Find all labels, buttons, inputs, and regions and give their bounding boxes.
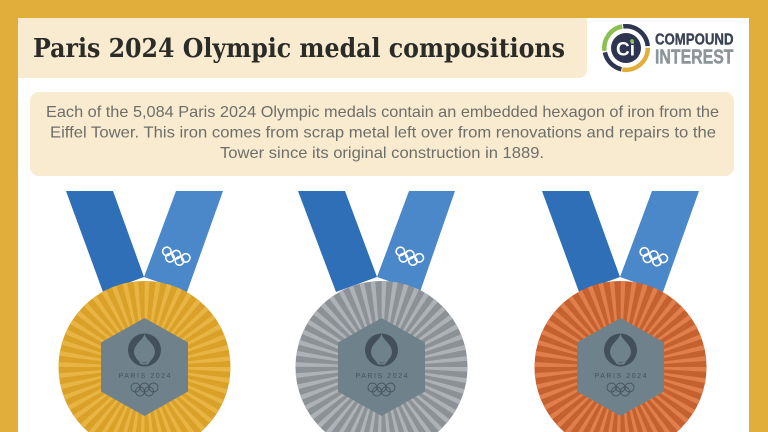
- silver disc: [296, 281, 468, 432]
- bronze disc: [534, 281, 706, 432]
- logo: Compound Interest: [604, 26, 734, 70]
- bronze disc: PARIS 2024: [594, 373, 647, 380]
- gold disc: [58, 281, 230, 432]
- bronze ribbon: [542, 191, 699, 292]
- intro text panel: Eiffel Tower. This iron comes from scrap metal left over from renovations and repairs to the: [50, 124, 716, 142]
- logo: Compound Interest: Ci: [616, 40, 635, 60]
- silver medal: [296, 191, 468, 432]
- title: Paris 2024 Olympic medal compositions: [33, 34, 565, 64]
- silver disc: PARIS 2024: [356, 373, 408, 380]
- logo: Compound Interest: COMPOUND: [655, 31, 734, 48]
- bronze medal: [534, 191, 706, 432]
- silver ribbon: [298, 191, 455, 292]
- intro text panel: Tower since its original construction in 1889.: [220, 145, 544, 162]
- intro text panel: Each of the 5,084 Paris 2024 Olympic medals contain an embedded hexagon of iron from the: [46, 104, 719, 121]
- title banner: [18, 18, 587, 78]
- intro text panel: [30, 92, 734, 176]
- gold medal: [58, 191, 230, 432]
- logo: Compound Interest: INTEREST: [655, 46, 734, 68]
- gold ribbon: [66, 191, 223, 292]
- gold disc: PARIS 2024: [118, 373, 171, 380]
